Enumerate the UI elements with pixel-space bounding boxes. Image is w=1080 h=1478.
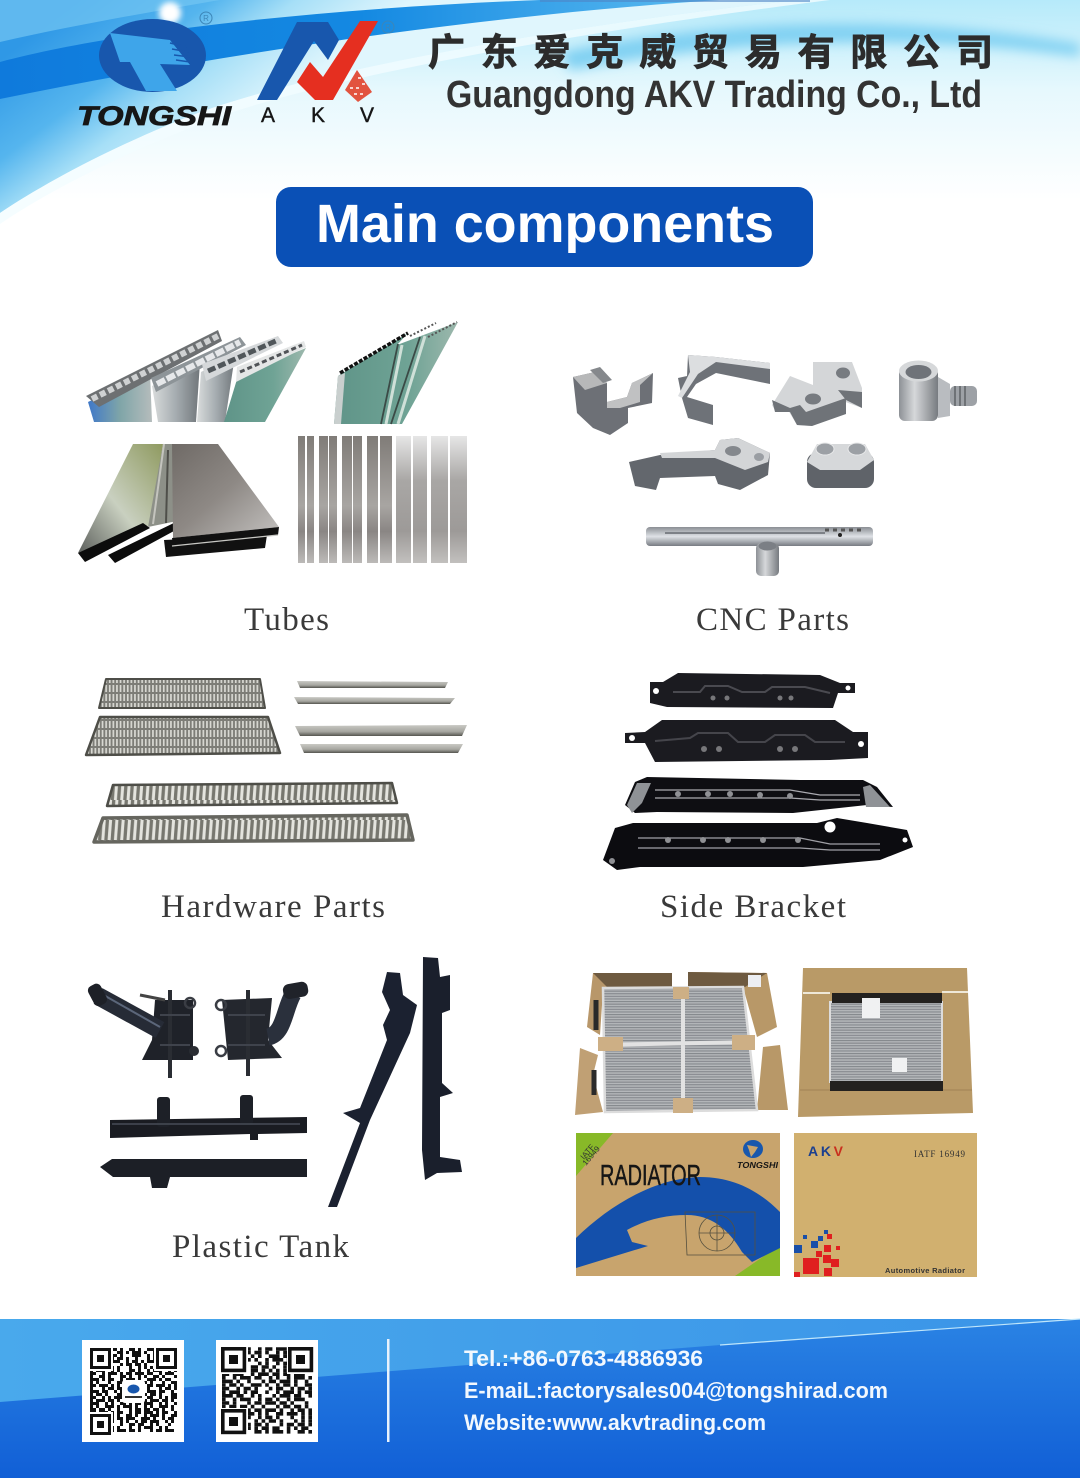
part: three lobe plate	[772, 362, 862, 426]
tank part left with pipe	[86, 982, 199, 1078]
logo: AKV: V	[360, 104, 374, 127]
label: Side Bracket: Side Bracket	[660, 889, 846, 925]
green corner with certification	[576, 1133, 613, 1176]
website: Website:www.akvtrading.com	[464, 1410, 766, 1435]
carton title: RADIATOR	[600, 1160, 701, 1192]
QR code 1	[82, 1340, 184, 1442]
green corner with certification: 16949	[581, 1144, 602, 1167]
side tank diagonal	[328, 972, 417, 1207]
email: E-maiL:factorysales004@tongshirad.com	[464, 1378, 888, 1403]
label: Tubes: Tubes	[244, 602, 329, 638]
photo: four multiport tubes	[86, 330, 306, 422]
part: header plate 1	[99, 679, 265, 708]
panel: side bracket	[603, 673, 913, 925]
photo: teal micro channel tubes	[334, 322, 458, 424]
logo: AKV	[257, 21, 394, 127]
part: long bar	[646, 527, 873, 576]
telephone: Tel.:+86-0763-4886936	[464, 1346, 703, 1371]
header logos and company name	[77, 12, 993, 131]
certification text: IATF 16949	[914, 1149, 966, 1159]
part: flange block	[807, 443, 874, 488]
photo: radiator on cardboard	[798, 968, 973, 1117]
part: machined block	[573, 367, 653, 435]
bracket 3	[625, 777, 893, 813]
photo: straight tube strips	[298, 436, 467, 563]
bracket 2	[625, 720, 868, 762]
pixel squares	[794, 1230, 840, 1277]
side tank vertical	[422, 957, 462, 1180]
logo: TONGSHI: R	[203, 14, 209, 23]
tank bar with nozzles	[110, 1095, 307, 1140]
part: side rails	[294, 681, 467, 753]
logo: AKV: R	[385, 23, 391, 32]
part: header plate 3	[107, 783, 397, 806]
panel: plastic tank	[86, 957, 462, 1265]
company name in English: Guangdong AKV Trading Co., Ltd	[446, 74, 982, 116]
carton: TONGSHI radiator	[576, 1133, 780, 1276]
logo: TONGSHI: TONGSHI	[77, 101, 232, 131]
tank bar lower	[100, 1159, 307, 1188]
blue arrow arc	[576, 1177, 780, 1268]
company name in Chinese: 广东爱克威贸易有限公司	[428, 32, 993, 73]
mini TONGSHI logo: TONGSHI	[737, 1161, 779, 1170]
footer divider	[387, 1339, 390, 1442]
carton: AKV automotive radiator	[794, 1133, 977, 1277]
logo: AKV: K	[311, 104, 325, 127]
photo: wide flat tubes	[78, 444, 279, 563]
panel: hardware parts	[86, 679, 467, 925]
panel: packaging	[575, 968, 977, 1277]
panel: CNC parts	[573, 355, 977, 638]
photo: radiator in open carton	[575, 972, 788, 1115]
heading: Main components	[276, 187, 813, 267]
bracket 4	[603, 818, 913, 870]
part: bracket arm	[629, 438, 770, 490]
part: header plate 2	[86, 717, 280, 755]
part: header plate 4	[94, 815, 413, 842]
contact details	[464, 1346, 888, 1435]
part: bent channel	[678, 355, 770, 425]
mini TONGSHI logo	[737, 1140, 779, 1170]
part: cylinder fitting	[899, 360, 977, 421]
label: CNC Parts: CNC Parts	[696, 602, 849, 638]
bracket 1	[650, 673, 855, 708]
panel: tubes	[78, 322, 467, 638]
label: Plastic Tank: Plastic Tank	[172, 1229, 350, 1265]
logo: TONGSHI	[77, 12, 232, 131]
footer band	[0, 1319, 1080, 1478]
fan line drawing	[685, 1212, 755, 1255]
tank part right with pipe	[216, 981, 309, 1076]
label: Hardware Parts: Hardware Parts	[161, 889, 385, 925]
header swoosh background	[0, 0, 1080, 224]
product name: Automotive Radiator	[885, 1266, 965, 1275]
logo: AKV: A	[261, 104, 275, 127]
QR code 2	[216, 1340, 318, 1442]
AKV mark: AKV	[808, 1143, 844, 1159]
heading: Main components: Main components	[316, 194, 774, 254]
green corner with certification: IATF	[579, 1143, 596, 1161]
